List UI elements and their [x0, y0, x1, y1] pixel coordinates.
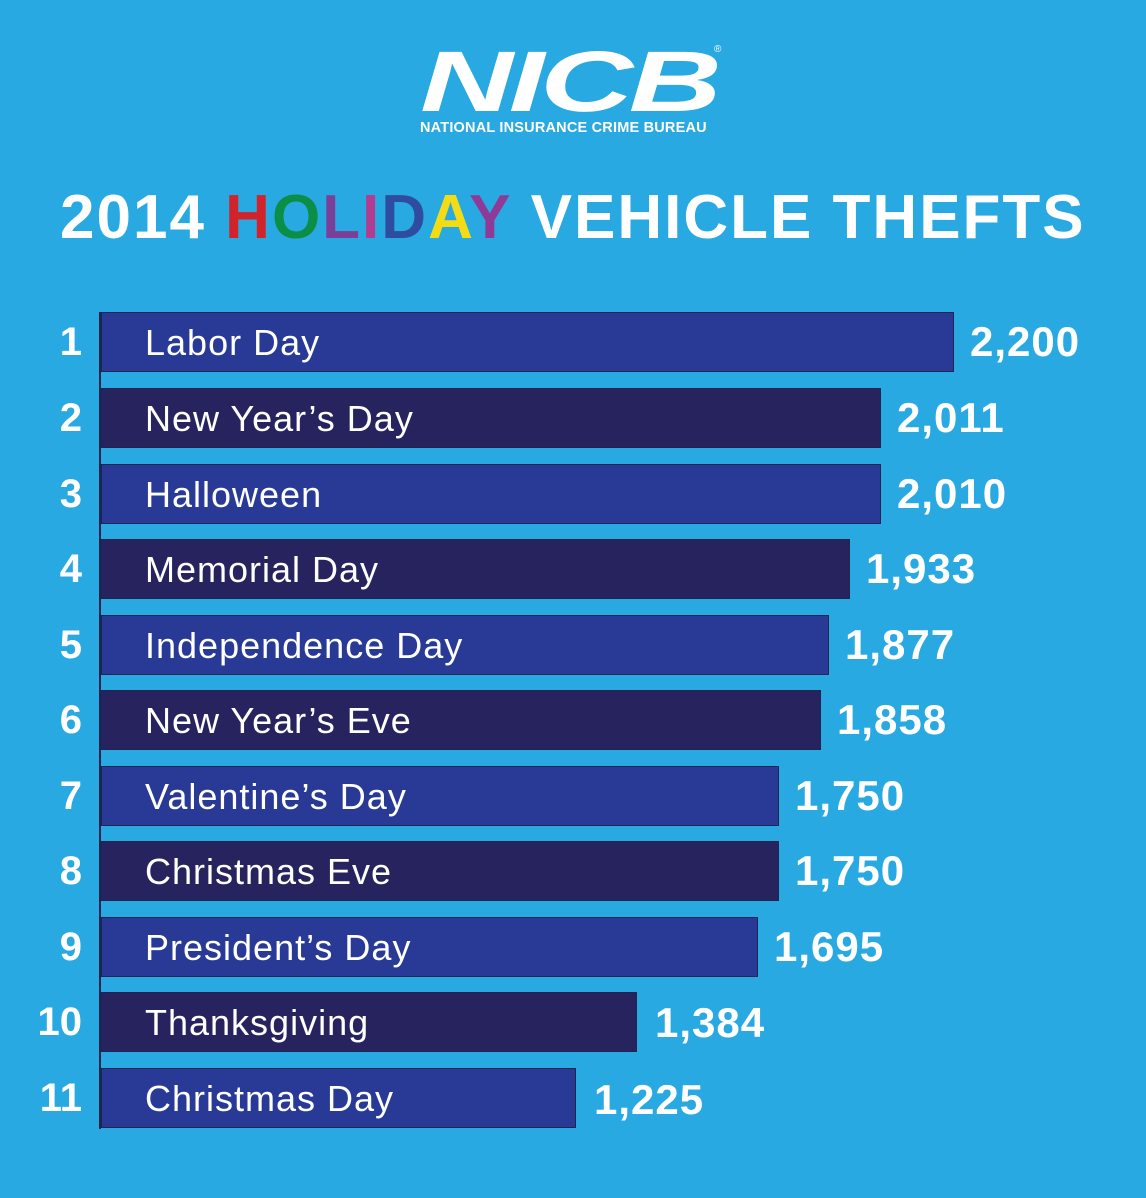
bar chart: Memorial Day — [145, 549, 379, 590]
bar chart: 1 — [60, 320, 82, 364]
bar chart: 1,225 — [594, 1076, 704, 1123]
bar chart: Halloween — [145, 474, 322, 515]
bar chart: 3 — [60, 472, 82, 516]
bar chart: Independence Day — [145, 625, 463, 666]
bar chart: President’s Day — [145, 927, 411, 968]
bar chart: 4 — [60, 547, 82, 591]
bar chart: 1,933 — [866, 545, 976, 592]
logo: NATIONAL INSURANCE CRIME BUREAU — [420, 120, 707, 136]
bar chart: 1,384 — [655, 999, 765, 1046]
bar chart: New Year’s Day — [145, 398, 414, 439]
logo: NICB — [420, 34, 717, 130]
bar chart: 2,011 — [897, 394, 1005, 441]
bar chart: Valentine’s Day — [145, 776, 407, 817]
bar chart: 2 — [60, 396, 82, 440]
bar chart: 7 — [60, 774, 82, 818]
bar chart: 1,750 — [795, 772, 905, 819]
axis line — [99, 312, 101, 1129]
bar chart: 9 — [60, 925, 82, 969]
bar chart: Labor Day — [145, 322, 320, 363]
bar chart: 10 — [38, 1000, 82, 1044]
bar chart: 8 — [60, 849, 82, 893]
bar chart: 2,200 — [970, 318, 1080, 365]
bar chart: 1,877 — [845, 621, 955, 668]
bar chart: 5 — [60, 623, 82, 667]
bar chart: Christmas Eve — [145, 851, 392, 892]
bar chart — [38, 312, 1080, 1128]
bar chart: 1,695 — [774, 923, 884, 970]
bar chart: 6 — [60, 698, 82, 742]
bar chart: Christmas Day — [145, 1078, 394, 1119]
bar chart: 1,858 — [837, 696, 947, 743]
bar chart: 1,750 — [795, 847, 905, 894]
title: 2014 HOLIDAY VEHICLE THEFTS — [60, 183, 1086, 252]
bar chart: 2,010 — [897, 470, 1007, 517]
logo: ® — [714, 44, 721, 55]
bar chart: Thanksgiving — [145, 1002, 369, 1043]
bar chart: 11 — [40, 1076, 82, 1120]
bar chart: New Year’s Eve — [145, 700, 412, 741]
